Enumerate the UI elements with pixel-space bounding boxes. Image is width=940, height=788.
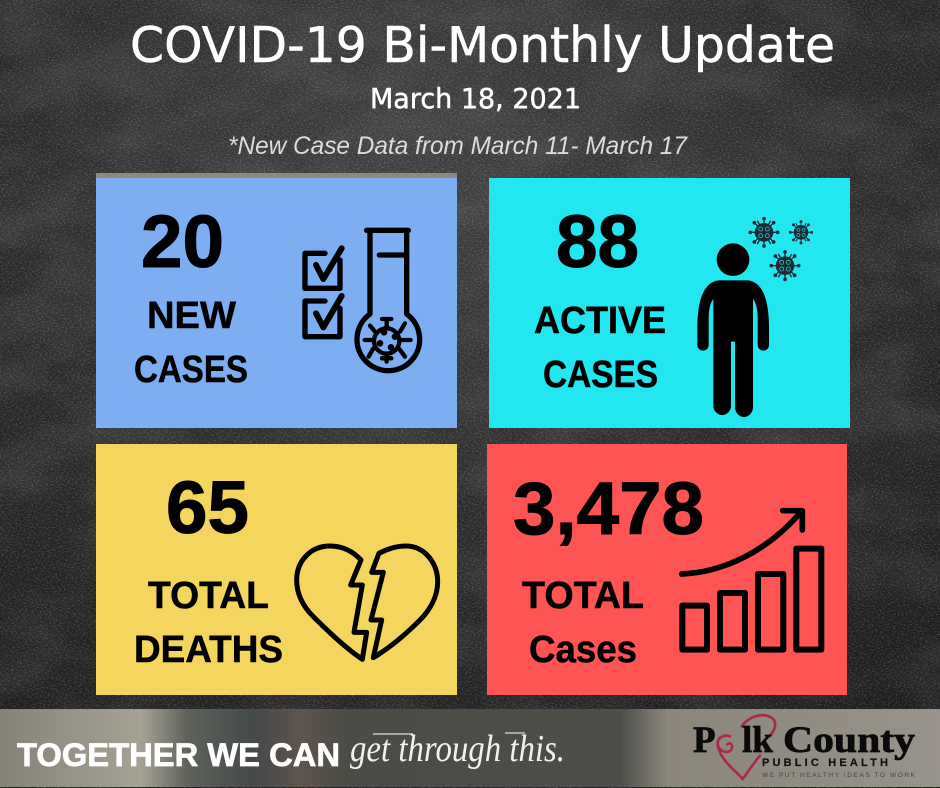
- label: total cases: Cases: [529, 629, 637, 671]
- slogan: TOGETHER WE CAN: [17, 737, 340, 773]
- number: total deaths: 65: [166, 466, 249, 549]
- logo wordmark: County: [783, 720, 916, 761]
- label: active cases: CASES: [543, 354, 658, 396]
- number: new cases: 20: [141, 200, 224, 283]
- number: active cases: 88: [556, 200, 639, 283]
- panel: active cases: [489, 178, 850, 428]
- label: new cases: CASES: [134, 349, 248, 391]
- logo: Polk County Public Health: [693, 715, 916, 779]
- logo wordmark: o: [716, 720, 734, 761]
- logo subtitle: PUBLIC HEALTH: [762, 757, 888, 769]
- logo tagline: WE PUT HEALTHY IDEAS TO WORK: [762, 772, 916, 779]
- logo heart: [718, 715, 775, 779]
- number: total cases: 3,478: [513, 467, 704, 550]
- panel: total cases: [487, 444, 847, 695]
- beige strip above the blue panel: [96, 173, 457, 178]
- footer band: [0, 709, 940, 787]
- label: total deaths: TOTAL: [148, 575, 269, 617]
- date: March 18, 2021: [370, 82, 581, 115]
- icon: person with viruses: [697, 217, 813, 417]
- logo wordmark: [693, 720, 916, 761]
- label: total cases: [522, 575, 644, 671]
- label: new cases: NEW: [147, 295, 236, 337]
- logo wordmark: lk: [742, 720, 773, 761]
- data note: *New Case Data from March 11- March 17: [228, 132, 688, 160]
- label: active cases: ACTIVE: [534, 300, 666, 342]
- label: total cases: TOTAL: [522, 575, 644, 617]
- logo wordmark: P: [693, 720, 716, 761]
- label: new cases: [134, 295, 248, 391]
- label: active cases: [534, 300, 666, 396]
- label: total deaths: DEATHS: [134, 629, 283, 671]
- panel: total deaths: [96, 444, 457, 695]
- icon: rising bar chart with arrow: [682, 511, 821, 650]
- panel: new cases: [96, 178, 457, 428]
- label: total deaths: [134, 575, 283, 671]
- icon: broken heart: [297, 546, 438, 659]
- icon: checklist and test tube: [305, 230, 420, 371]
- script slogan: get through this.: [350, 728, 565, 770]
- title: COVID-19 Bi-Monthly Update: [130, 17, 835, 74]
